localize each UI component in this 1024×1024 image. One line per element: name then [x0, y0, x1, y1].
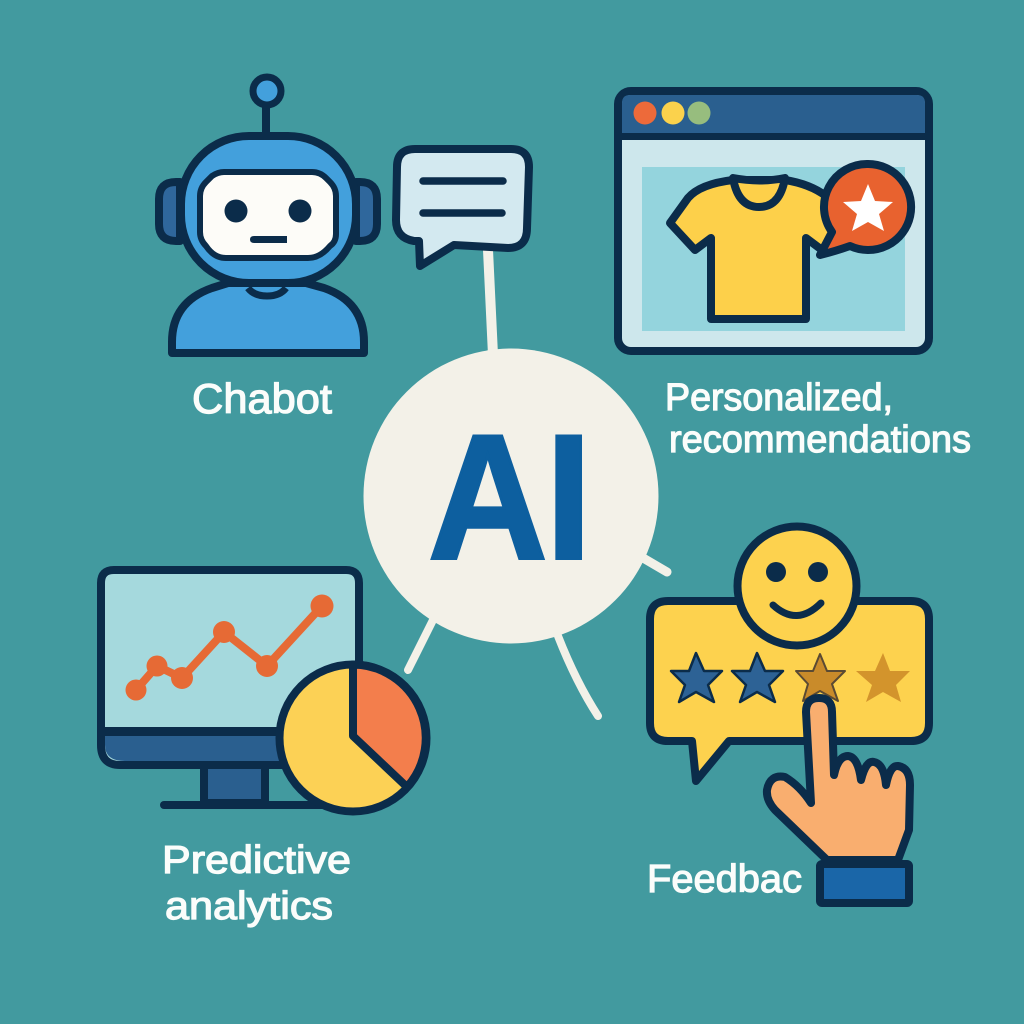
browser frame — [618, 91, 929, 351]
icon: chatbot robot — [159, 77, 377, 353]
pointing hand — [767, 698, 910, 860]
icon: browser window with recommendation — [618, 91, 929, 351]
label: Feedbac: Feedbac — [647, 858, 802, 901]
central AI circle — [364, 348, 658, 644]
connector lines — [408, 250, 667, 716]
robot antenna — [253, 77, 281, 136]
monitor stand — [164, 765, 330, 805]
shirt cuff — [820, 864, 909, 903]
robot body — [172, 283, 364, 353]
icon: star badge — [820, 164, 911, 255]
rating stars — [671, 653, 910, 702]
browser title bar — [622, 95, 925, 133]
smiley face — [738, 526, 856, 646]
icon: analytics monitor — [101, 570, 426, 812]
robot head — [181, 136, 356, 283]
monitor frame — [101, 570, 359, 765]
icon: speech bubble — [396, 149, 529, 266]
pie chart — [280, 664, 426, 812]
label: Predictive analytics: Predictive — [162, 839, 351, 882]
label: Personalized, recommendations: Personalized, — [665, 377, 893, 419]
line chart — [126, 594, 334, 700]
monitor chin — [105, 736, 355, 761]
product panel — [642, 167, 905, 331]
rating speech bubble — [650, 601, 929, 781]
label: Personalized, recommendations: recommendations — [669, 419, 971, 461]
robot ears — [159, 182, 377, 241]
AI heading: AI — [428, 398, 592, 597]
robot collar — [248, 288, 286, 296]
label: Personalized, recommendations — [665, 377, 971, 461]
icon: feedback rating — [650, 526, 929, 903]
icon: yellow t-shirt — [670, 178, 840, 319]
robot face — [200, 172, 336, 258]
robot eyes and mouth — [224, 200, 312, 243]
label: Chabot: Chabot — [192, 375, 332, 422]
window buttons — [634, 102, 710, 124]
label: Predictive analytics — [162, 839, 351, 928]
label: Predictive analytics: analytics — [165, 885, 333, 928]
